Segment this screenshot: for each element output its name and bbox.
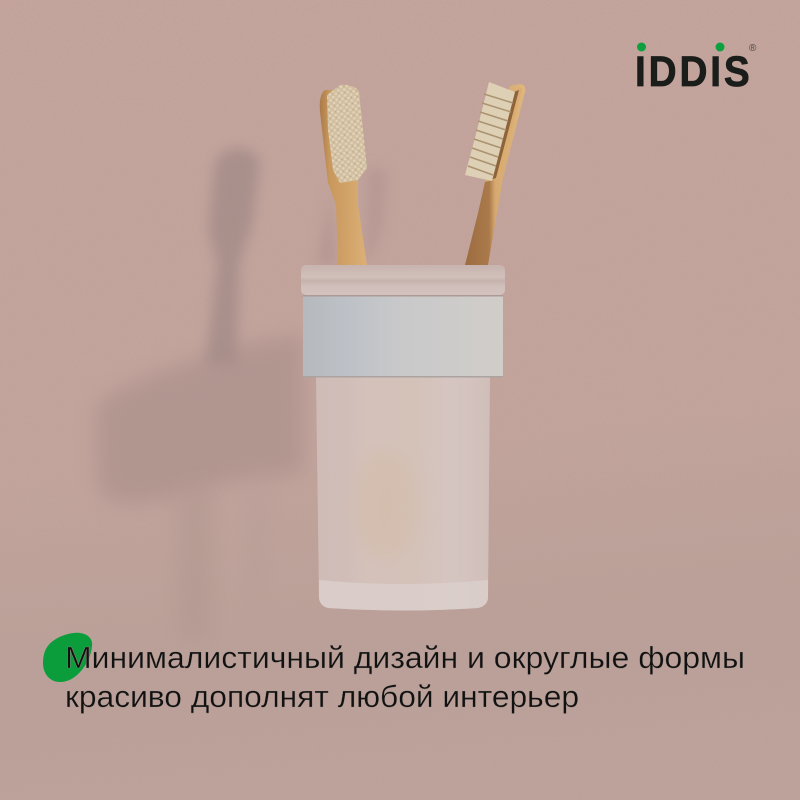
- handle: [320, 90, 367, 265]
- headline text: красиво дополнят любой интерьер: [65, 679, 579, 714]
- frosted glass body: [316, 376, 490, 610]
- registered mark: ®: [749, 43, 757, 54]
- tumbler holder: [301, 265, 505, 610]
- headline text: Минималистичный дизайн и округлые формы: [65, 640, 745, 675]
- metal band: [303, 296, 503, 377]
- toothbrush: right: [465, 82, 525, 265]
- cast shadow of holder and brushes: [97, 148, 388, 640]
- toothbrush: left: [320, 85, 367, 265]
- green accent blob: [43, 633, 92, 682]
- logo dots: [637, 42, 646, 52]
- handle: [465, 84, 525, 265]
- bristles: [465, 82, 515, 181]
- headline text: [65, 640, 745, 714]
- logo: IDDIS: IDDIS: [635, 47, 753, 95]
- thick glass base: [319, 580, 488, 610]
- bristles: [327, 85, 367, 183]
- glass rim: [301, 265, 505, 295]
